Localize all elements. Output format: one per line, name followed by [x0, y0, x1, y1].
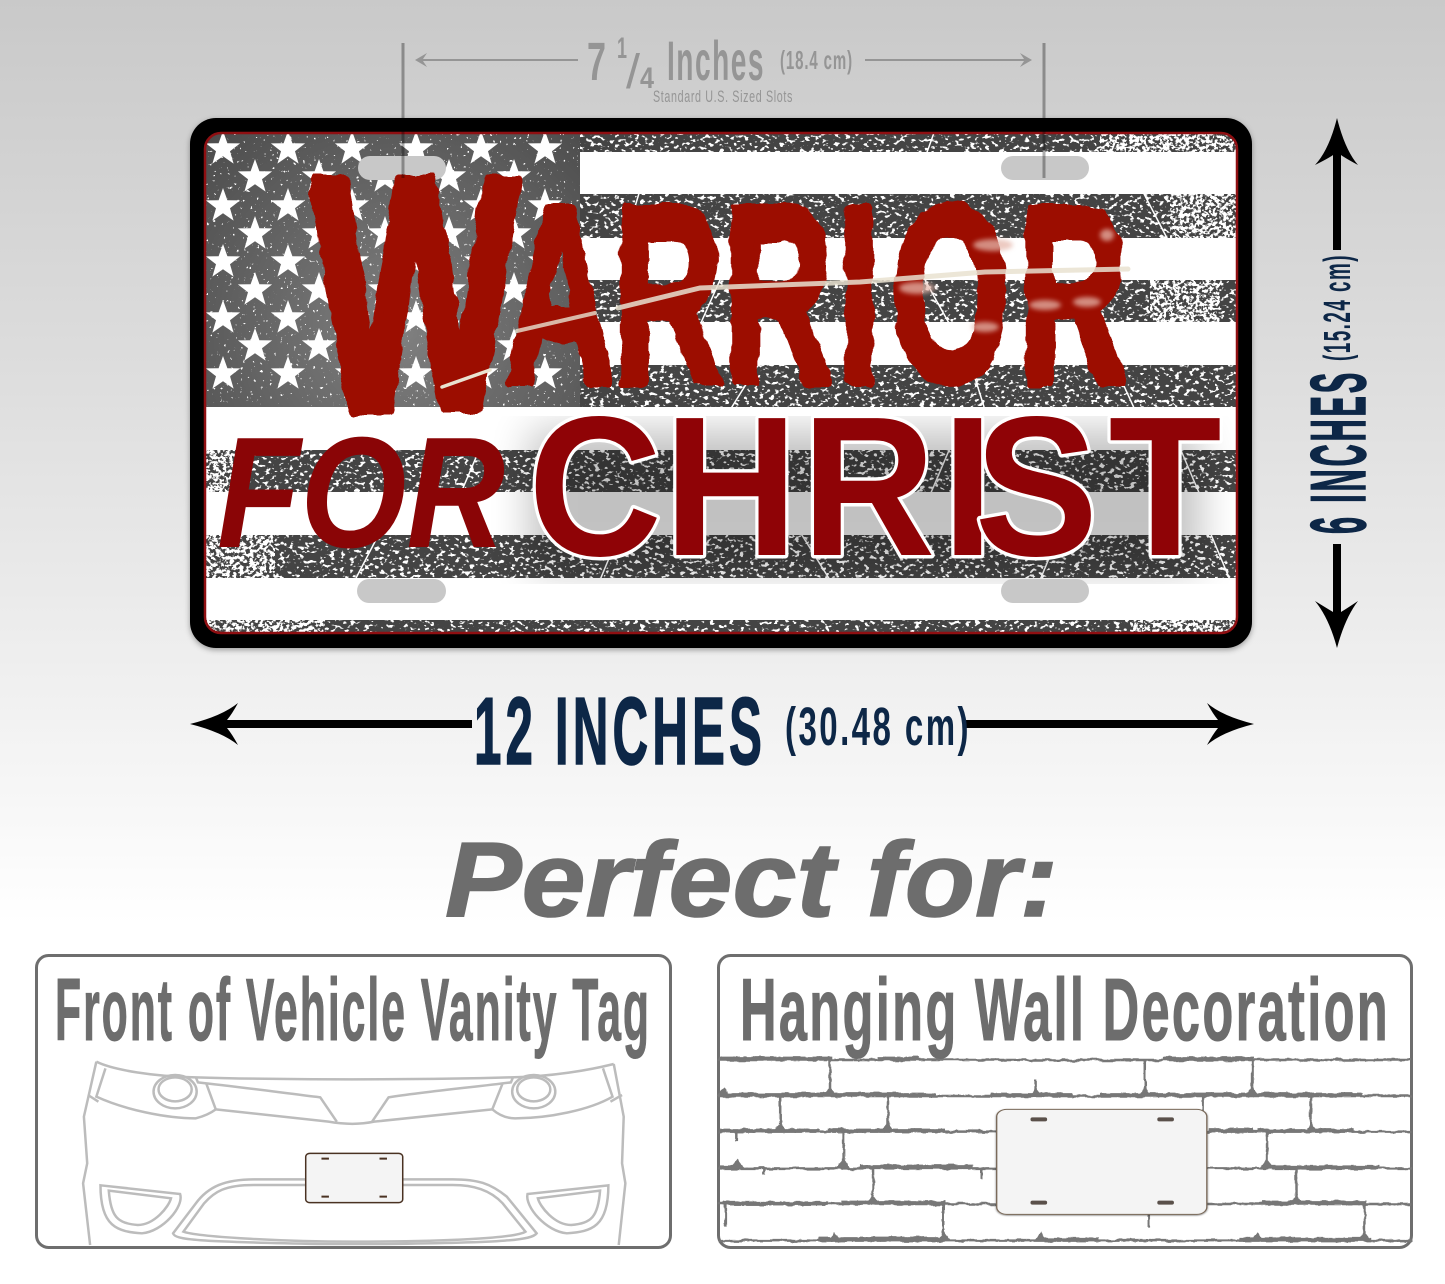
slot measurement text: Standard U.S. Sized Slots	[653, 87, 793, 106]
flag stars	[206, 131, 562, 389]
panel frame	[36, 956, 670, 1248]
shadow behind CHRIST	[530, 430, 1200, 570]
slot arrow left	[415, 53, 578, 67]
flag canton	[204, 132, 580, 407]
width metric label: (30.48 cm)	[785, 697, 971, 757]
scratch across WARRIOR	[442, 229, 1128, 387]
small plate on car	[306, 1153, 403, 1203]
panel: front of vehicle: Front of Vehicle Vanity Tag	[55, 960, 651, 1059]
gray flag stripes	[204, 132, 1238, 634]
slot arrow right	[865, 53, 1032, 67]
license plate	[190, 111, 1252, 648]
word: WARRIOR	[313, 111, 1127, 479]
slot guide lines	[402, 43, 1046, 178]
slot measurement text: 4	[640, 62, 654, 95]
width label: 12 INCHES	[474, 678, 766, 785]
width arrow	[190, 678, 1254, 785]
word: CHRIST: CHRIST	[528, 375, 1222, 597]
brick wall drawing	[717, 1059, 1412, 1241]
panel frame	[718, 956, 1412, 1248]
plate flag artwork	[204, 130, 1238, 634]
plate slots	[1032, 1119, 1172, 1203]
heading: Perfect for: Perfect for:	[445, 821, 1058, 939]
slot measurement text: 1	[617, 32, 627, 65]
panel: front of vehicle	[36, 956, 670, 1248]
height arrow: (15.24 cm)	[1317, 254, 1359, 361]
slot measurement text: Inches	[667, 29, 765, 92]
width arrow line and heads	[190, 703, 1254, 745]
panel: hanging wall decoration	[717, 956, 1412, 1248]
slot measurement text: (18.4 cm)	[780, 45, 853, 75]
slot width dimension	[402, 29, 1046, 178]
height arrow line and heads	[1315, 118, 1358, 648]
canton distress	[204, 132, 580, 407]
height arrow: 6 INCHES	[1294, 370, 1382, 534]
word: FOR: FOR	[217, 405, 505, 581]
heavily worn stripe patches	[204, 132, 1238, 634]
slot measurement text: /	[626, 46, 641, 99]
stripe distress	[204, 130, 1238, 634]
car line drawing	[83, 1062, 625, 1245]
letter W: W	[313, 111, 520, 479]
slot measurement text	[587, 29, 853, 106]
plate red border	[205, 133, 1237, 633]
hanging plate	[997, 1109, 1207, 1214]
letters ARRIOR: ARRIOR	[505, 154, 1127, 434]
plate black frame	[190, 118, 1252, 648]
mounting slots	[357, 156, 1089, 603]
slot measurement text: 7	[587, 32, 606, 92]
worn patches on letters	[899, 229, 1114, 332]
